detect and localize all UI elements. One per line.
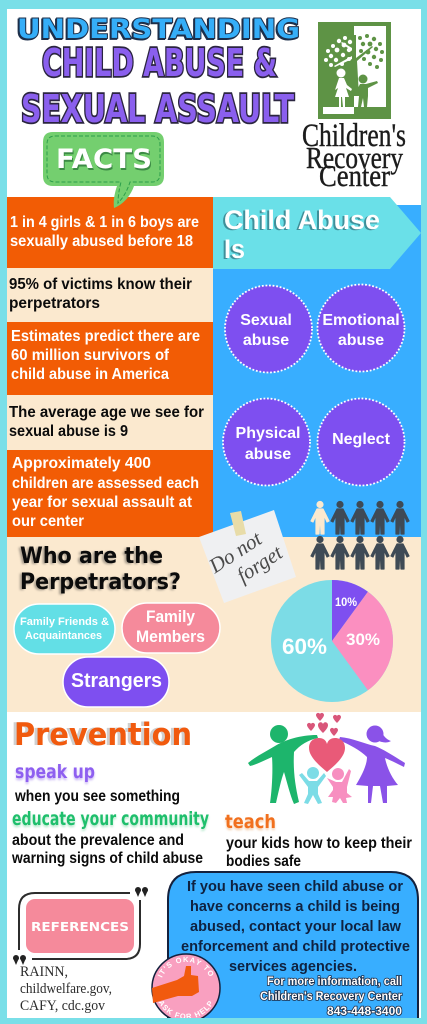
heading: who are the perpetrators	[20, 544, 181, 595]
panel: who are the perpetrators	[7, 537, 421, 712]
callout: contact agencies: enforcement and child protective	[181, 938, 410, 955]
panel: child abuse is	[213, 197, 421, 537]
heading: child abuse is: Child Abuse	[224, 205, 380, 235]
callout: contact agencies: have concerns a child is being	[190, 898, 400, 915]
circle: physical abuse: abuse	[245, 446, 291, 463]
fact: average age: The average age we see for	[9, 404, 204, 421]
sticky note: do not forget: forget	[232, 540, 288, 587]
badge: it's okay to ask for help	[151, 953, 221, 1018]
logo: Children's Recovery Center: Recovery	[306, 140, 403, 175]
fact: prevalence: sexually abused before 18	[10, 233, 193, 250]
pill: family members: Members	[136, 627, 205, 646]
circle: sexual abuse: abuse	[243, 332, 289, 349]
tip: educate your community: about the prevalence and	[12, 832, 184, 849]
fact: prevalence	[10, 214, 199, 250]
heading: prevention: Prevention	[14, 717, 192, 753]
pill: strangers	[63, 657, 169, 707]
title: UNDERSTANDING	[17, 14, 300, 45]
callout: contact agencies: 843-448-3400	[327, 1006, 402, 1018]
tip: teach: bodies safe	[226, 853, 301, 870]
circle: sexual abuse: Sexual	[240, 312, 292, 329]
title: CHILD ABUSE &	[42, 41, 277, 85]
facts speech bubble: FACTS	[56, 144, 152, 175]
tip: teach	[225, 811, 412, 870]
logo: Children's Recovery Center	[302, 22, 406, 193]
references label: REFERENCES	[31, 919, 129, 934]
fact: children assessed	[12, 455, 199, 530]
title: SEXUAL ASSAULT	[21, 87, 294, 131]
fact: children assessed: children are assessed each	[12, 475, 199, 492]
pie chart: 30%	[346, 630, 380, 649]
callout: contact agencies: Children's Recovery Center	[260, 991, 402, 1003]
fact: survivors: Estimates predict there are	[11, 328, 200, 345]
tip: teach: your kids how to keep their	[226, 835, 412, 852]
tip: educate your community: educate your community	[12, 808, 209, 830]
panel: facts	[7, 197, 213, 537]
sticky note: do not forget: Do not	[204, 526, 267, 578]
pill: family members	[122, 603, 220, 653]
circle: sexual abuse	[225, 286, 312, 372]
pill: family friends	[14, 604, 115, 654]
heading: child abuse is	[224, 205, 380, 264]
tip: educate your community: warning signs of child abuse	[11, 850, 203, 867]
circle: emotional abuse	[318, 284, 404, 372]
tip: speak up	[14, 761, 180, 805]
facts speech bubble	[43, 132, 164, 208]
circle: physical abuse	[223, 398, 310, 486]
fact: victims know perpetrators: perpetrators	[9, 295, 100, 312]
heading: child abuse is: Is	[224, 234, 245, 264]
panel: prevention	[11, 717, 412, 870]
fact: children assessed: Approximately 400	[12, 455, 151, 472]
references frame	[19, 893, 140, 959]
pill: strangers: Strangers	[71, 670, 162, 692]
fact: average age	[9, 404, 204, 440]
fact: prevalence: 1 in 4 girls & 1 in 6 boys are	[10, 214, 199, 231]
pill: family friends: Acquaintances	[25, 630, 102, 642]
circle: neglect	[318, 398, 404, 486]
fact: victims know perpetrators: 95% of victims know their	[9, 276, 192, 293]
callout: contact agencies: abused, contact your local law	[190, 918, 401, 935]
circle: emotional abuse: abuse	[338, 332, 384, 349]
pie chart: 10%	[335, 595, 357, 609]
arrow banner	[213, 197, 421, 269]
title	[17, 14, 300, 131]
heading: who are the perpetrators: Who are the	[20, 544, 163, 569]
logo: Children's Recovery Center: Center	[319, 158, 391, 193]
tip: speak up: speak up	[15, 761, 95, 783]
circle: physical abuse: Physical	[236, 425, 300, 442]
fact: average age: sexual abuse is 9	[9, 423, 128, 440]
reference list	[20, 964, 112, 1014]
callout: contact agencies: services agencies.	[229, 958, 357, 975]
sticky note: do not forget	[199, 510, 296, 603]
reference list: childwelfare.gov,	[20, 981, 112, 997]
circle: neglect: Neglect	[332, 431, 391, 448]
callout: contact agencies	[168, 872, 418, 1018]
heading: who are the perpetrators: Perpetrators?	[20, 570, 181, 595]
people icons: 1 in 10	[311, 502, 409, 569]
fact: victims know perpetrators	[9, 276, 192, 312]
pie chart	[271, 580, 393, 702]
pill: family members: Family	[146, 607, 195, 626]
tip: teach: teach	[225, 811, 276, 833]
tip: speak up: when you see something	[14, 788, 180, 805]
badge: it's okay to ask for help: IT'S OKAY TO	[158, 956, 214, 978]
fact: survivors: 60 million survivors of	[11, 347, 170, 364]
icon: family with heart	[248, 713, 405, 804]
pie chart: 60%	[282, 634, 327, 659]
tip: educate your community	[11, 808, 209, 867]
pill: family friends: Family Friends &	[20, 616, 109, 628]
callout: contact agencies: If you have seen child abuse or	[187, 878, 403, 895]
reference list: RAINN,	[20, 964, 68, 980]
badge: it's okay to ask for help: ASK FOR HELP	[158, 1001, 212, 1018]
panel: references	[13, 887, 148, 1014]
fact: children assessed: year for sexual assault at	[12, 494, 193, 511]
fact: survivors: child abuse in America	[11, 366, 169, 383]
quote marks	[13, 887, 148, 965]
callout: contact agencies: For more information, call	[267, 976, 402, 988]
fact: survivors	[11, 328, 200, 383]
reference list: CAFY, cdc.gov	[20, 998, 105, 1014]
circle: emotional abuse: Emotional	[322, 312, 400, 329]
fact: children assessed: our center	[12, 513, 84, 530]
